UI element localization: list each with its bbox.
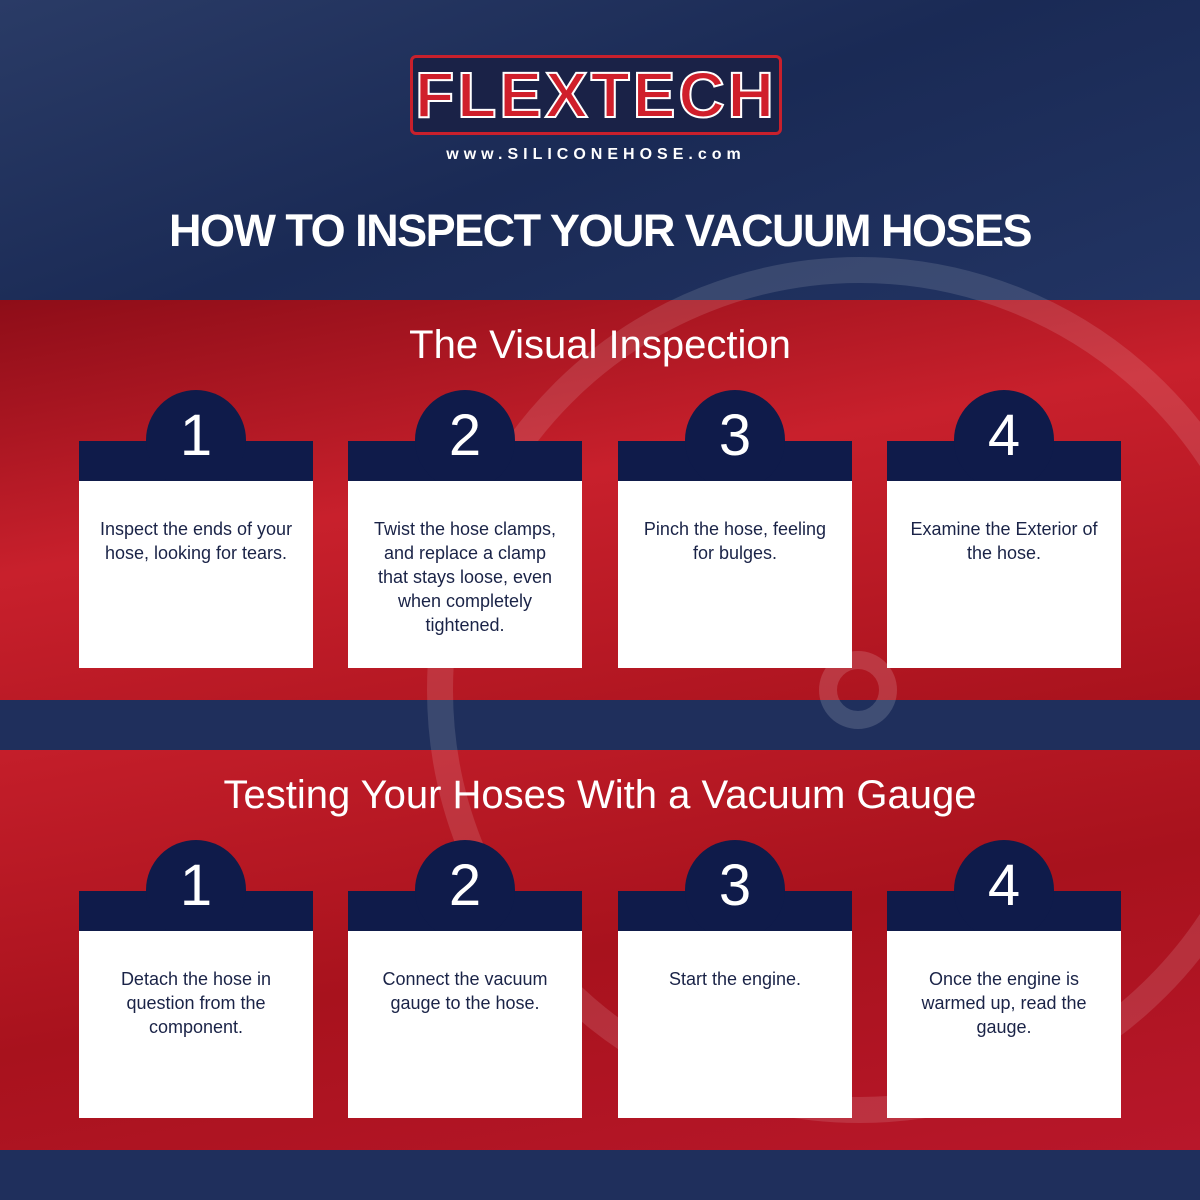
card 1 row 1: 1 [180,403,212,468]
background: red band 2 [0,750,1200,1150]
card 3 row 1: Pinch the hose, feeling for bulges. [644,519,826,563]
card 1 row 2: 1 [180,853,212,918]
card 4 row 1 [887,390,1121,668]
card 4 row 2 [887,840,1121,1118]
card 2 row 1 [348,390,582,668]
card 4 row 2: 4 [988,853,1020,918]
card 2 row 2: 2 [449,853,481,918]
heading: visual inspection: The Visual Inspection [409,323,791,367]
background: bottom navy [0,1150,1200,1200]
card 3 row 2: Start the engine. [669,969,801,989]
background: top navy [0,0,1200,300]
card 4 row 1: 4 [988,403,1020,468]
card 1 row 2 [79,840,313,1118]
background: red band 1 [0,300,1200,700]
card 3 row 2 [618,840,852,1118]
card 3 row 1 [618,390,852,668]
card 4 row 1: Examine the Exterior of the hose. [910,519,1098,563]
logo url: www.SILICONEHOSE.com [446,146,746,163]
card 2 row 2: Connect the vacuum gauge to the hose. [382,969,548,1013]
card 4 row 2: Once the engine is warmed up, read the gauge. [921,969,1087,1037]
card 1 row 1 [79,390,313,668]
card 2 row 1: Twist the hose clamps, and replace a clamp that stays loose, even when completely tightened. [374,519,556,635]
card 1 row 2: Detach the hose in question from the component. [121,969,271,1037]
card 2 row 2 [348,840,582,1118]
logo: FLEXTECH [415,59,777,131]
card 3 row 1: 3 [719,403,751,468]
card 2 row 1: 2 [449,403,481,468]
title: HOW TO INSPECT YOUR VACUUM HOSES [169,205,1031,256]
heading: vacuum gauge: Testing Your Hoses With a Vacuum Gauge [223,773,976,817]
card 3 row 2: 3 [719,853,751,918]
card 1 row 1: Inspect the ends of your hose, looking for tears. [100,519,292,563]
background: navy band [0,700,1200,750]
